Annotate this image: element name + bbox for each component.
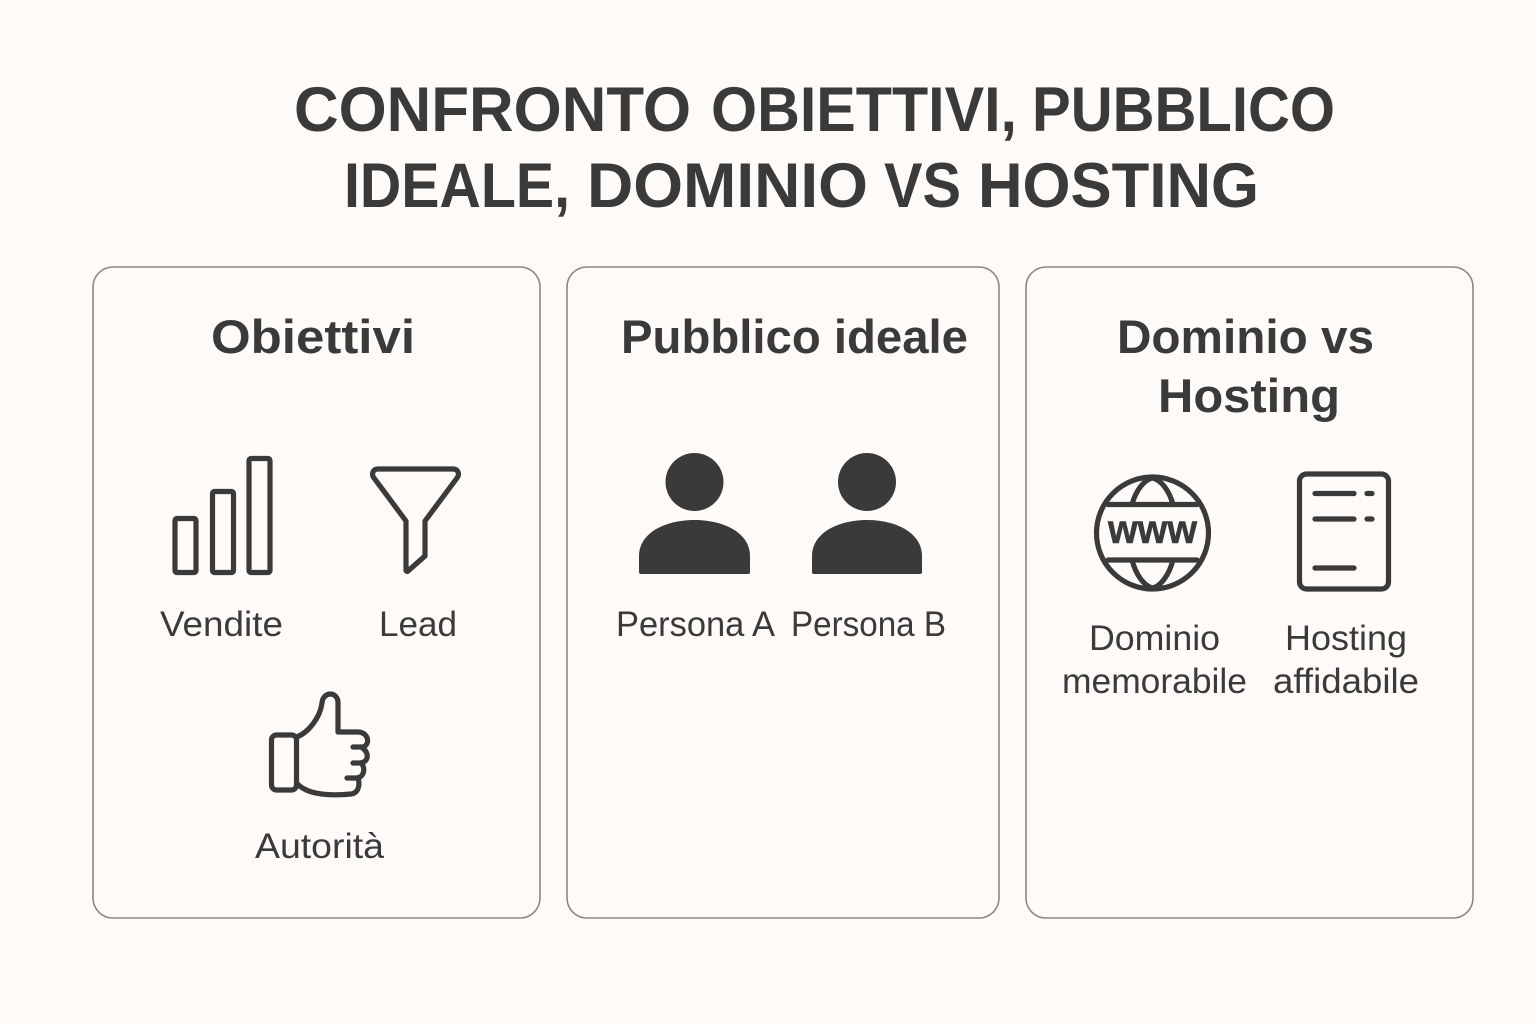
icon: www globe: www [1107,506,1197,552]
label: lead: Lead [379,605,457,644]
icon: www globe [1096,477,1208,589]
label: hosting affidabile: Hosting [1285,619,1407,658]
icon: persona B [812,453,922,574]
panel: dominio vs hosting [1026,267,1473,918]
heading: dominio vs hosting: Hosting [1158,369,1340,422]
label: dominio memorabile: memorabile [1062,662,1247,701]
heading: dominio vs hosting: Dominio vs [1117,310,1374,363]
panel: pubblico ideale [567,267,999,918]
icon: thumbs up [272,694,368,795]
title: CONFRONTO [294,75,691,145]
label: dominio memorabile [1062,619,1247,701]
title: PUBBLICO [1032,75,1335,145]
label: hosting affidabile [1273,619,1419,701]
title: OBIETTIVI, [711,75,1017,145]
title: VS [884,151,961,221]
label: vendite: Vendite [160,605,283,644]
label: autorità: Autorità [255,827,385,866]
title: HOSTING [978,151,1259,221]
icon: hosting server [1300,474,1388,589]
title: DOMINIO [587,151,868,221]
label: persona B: Persona B [791,605,946,644]
panel: obiettivi [93,267,540,918]
icon: funnel [373,469,458,571]
heading: obiettivi: Obiettivi [211,310,415,363]
heading: pubblico ideale: Pubblico ideale [621,310,968,363]
label: persona A: Persona A [616,605,776,644]
label: hosting affidabile: affidabile [1273,662,1419,701]
heading: dominio vs hosting [1117,310,1374,422]
title [294,75,1335,221]
icon: bar chart [175,458,270,572]
label: dominio memorabile: Dominio [1089,619,1220,658]
icon: persona A [639,453,750,574]
title: IDEALE, [344,151,570,221]
